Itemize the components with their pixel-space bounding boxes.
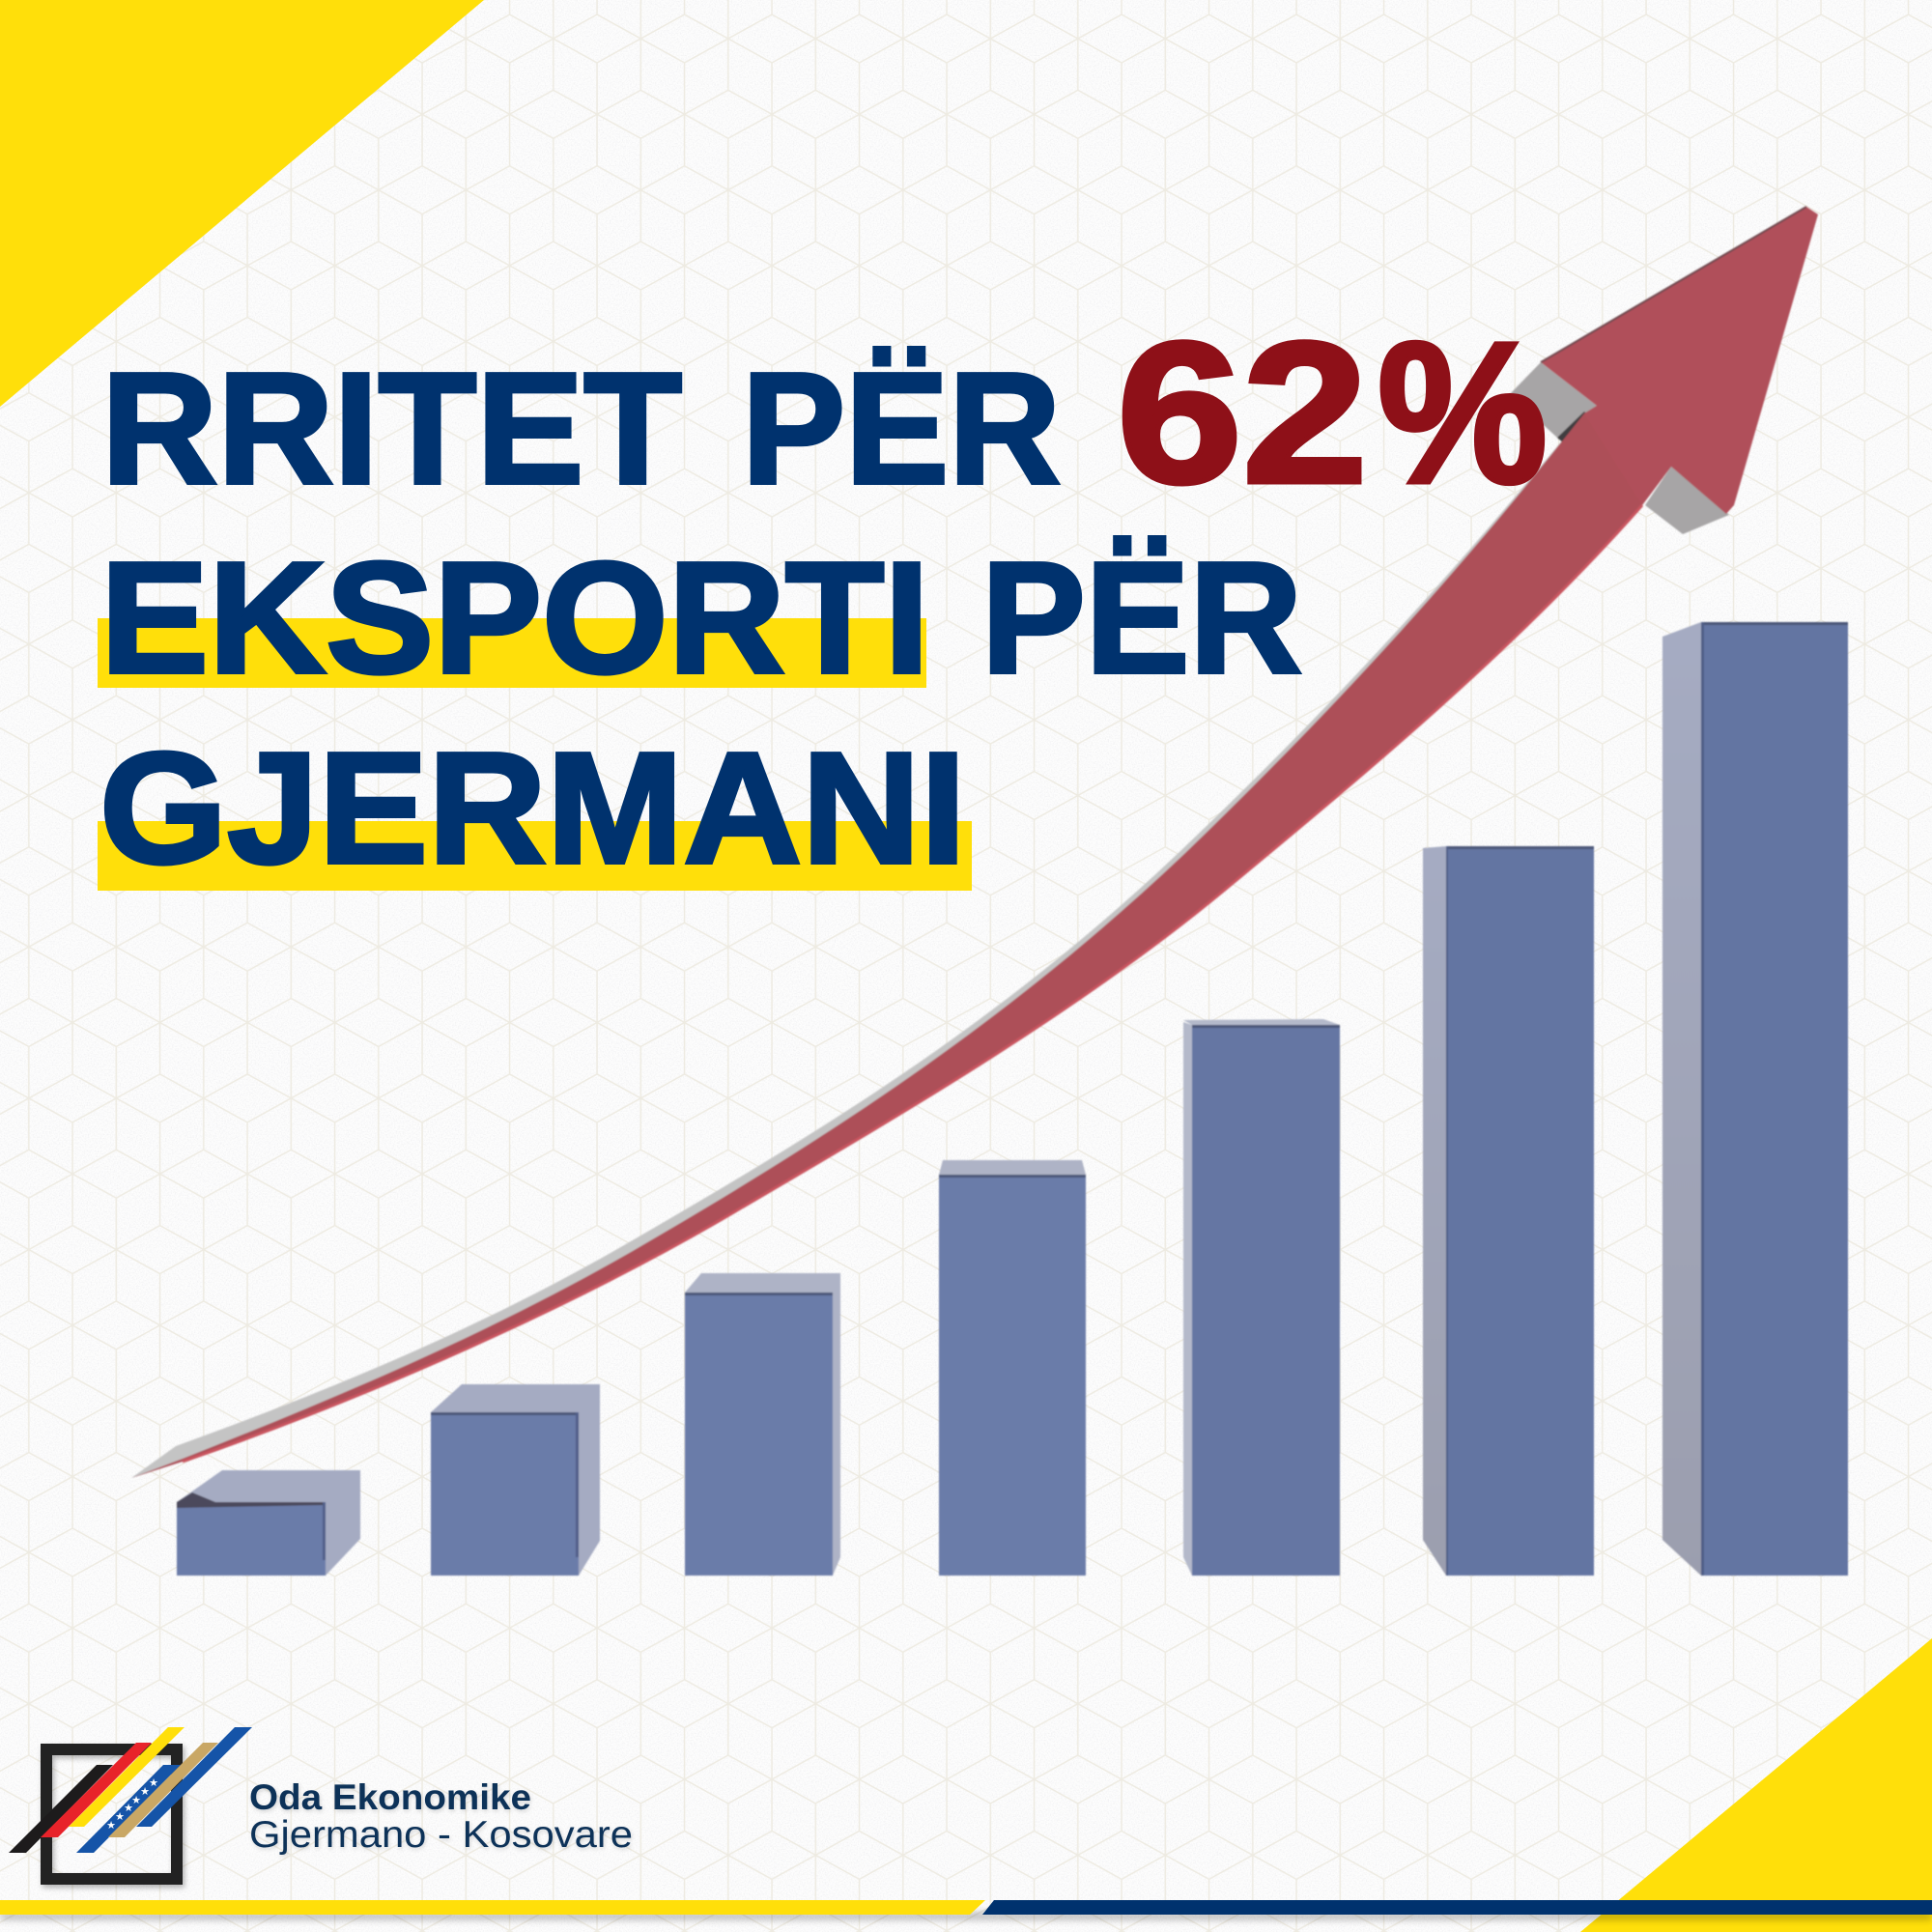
- organisation name: Oda Ekonomike: [249, 1777, 531, 1817]
- organisation name: Gjermano - Kosovare: [249, 1814, 633, 1856]
- title: EKSPORTI: [100, 529, 929, 706]
- 62 percent figure: 62: [1117, 301, 1368, 526]
- bar 7: [1662, 622, 1848, 1576]
- logo frame: [46, 1749, 177, 1879]
- title: PËR: [742, 340, 1061, 517]
- logo stars: ★: [149, 1777, 158, 1789]
- logo stars: [106, 1777, 158, 1832]
- highlight under EKSPORTI: [98, 618, 926, 688]
- bar 5: [1183, 1019, 1340, 1576]
- bar 4: [939, 1160, 1086, 1576]
- logo stars: ★: [106, 1820, 116, 1832]
- bottom navy bar: [982, 1900, 1932, 1915]
- bar 2: [431, 1384, 600, 1576]
- logo stars: ★: [115, 1811, 125, 1823]
- title: GJERMANI: [99, 720, 966, 896]
- title: PËR: [981, 529, 1302, 706]
- bar 6: [1423, 846, 1594, 1576]
- organisation name: [249, 1777, 633, 1856]
- logo stars: ★: [131, 1795, 141, 1806]
- bar 1: [177, 1470, 360, 1576]
- arrow head top edge: [1541, 207, 1806, 362]
- bottom yellow bar: [0, 1900, 985, 1915]
- yellow corner bottom-right: [1580, 1638, 1932, 1932]
- 62 percent figure: %: [1378, 301, 1548, 526]
- logo stars: ★: [124, 1803, 133, 1814]
- highlight under GJERMANI: [98, 821, 972, 891]
- bar chart: [177, 622, 1848, 1576]
- bar 3: [685, 1273, 840, 1576]
- arrow shaft red: [131, 406, 1671, 1478]
- 62 percent figure: [1117, 301, 1548, 526]
- arrow shaft underside: [131, 413, 1642, 1478]
- title: [99, 340, 1302, 896]
- arrow head grey faces: [1510, 362, 1729, 534]
- shaft lower highlight: [183, 505, 1642, 1462]
- yellow corner top-left: [0, 0, 484, 407]
- logo stripes german: [9, 1727, 185, 1853]
- logo stars: ★: [140, 1786, 150, 1798]
- bottom bar shadow: [0, 1913, 1932, 1919]
- arrow head red: [1541, 207, 1818, 514]
- logo: [9, 1727, 252, 1879]
- title: RRITET: [101, 340, 682, 517]
- growth arrow: [131, 207, 1818, 1478]
- logo stripes kosovar: [76, 1727, 252, 1853]
